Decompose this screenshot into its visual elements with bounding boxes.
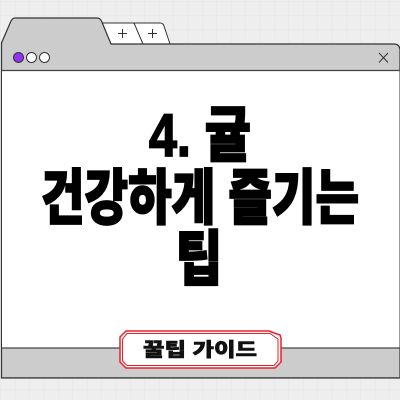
icon: plus — [118, 29, 127, 38]
badge: tip guide: 꿀팁 가이드 — [143, 339, 257, 361]
badge: tip guide — [120, 331, 281, 368]
title: 4. 귤 — [149, 102, 251, 169]
icon: close — [379, 53, 388, 62]
icon: plus second tab — [148, 29, 157, 38]
inactive browser tabs — [102, 23, 170, 44]
window control dots — [14, 52, 50, 62]
title: 팁 — [176, 226, 222, 293]
title — [41, 102, 359, 293]
